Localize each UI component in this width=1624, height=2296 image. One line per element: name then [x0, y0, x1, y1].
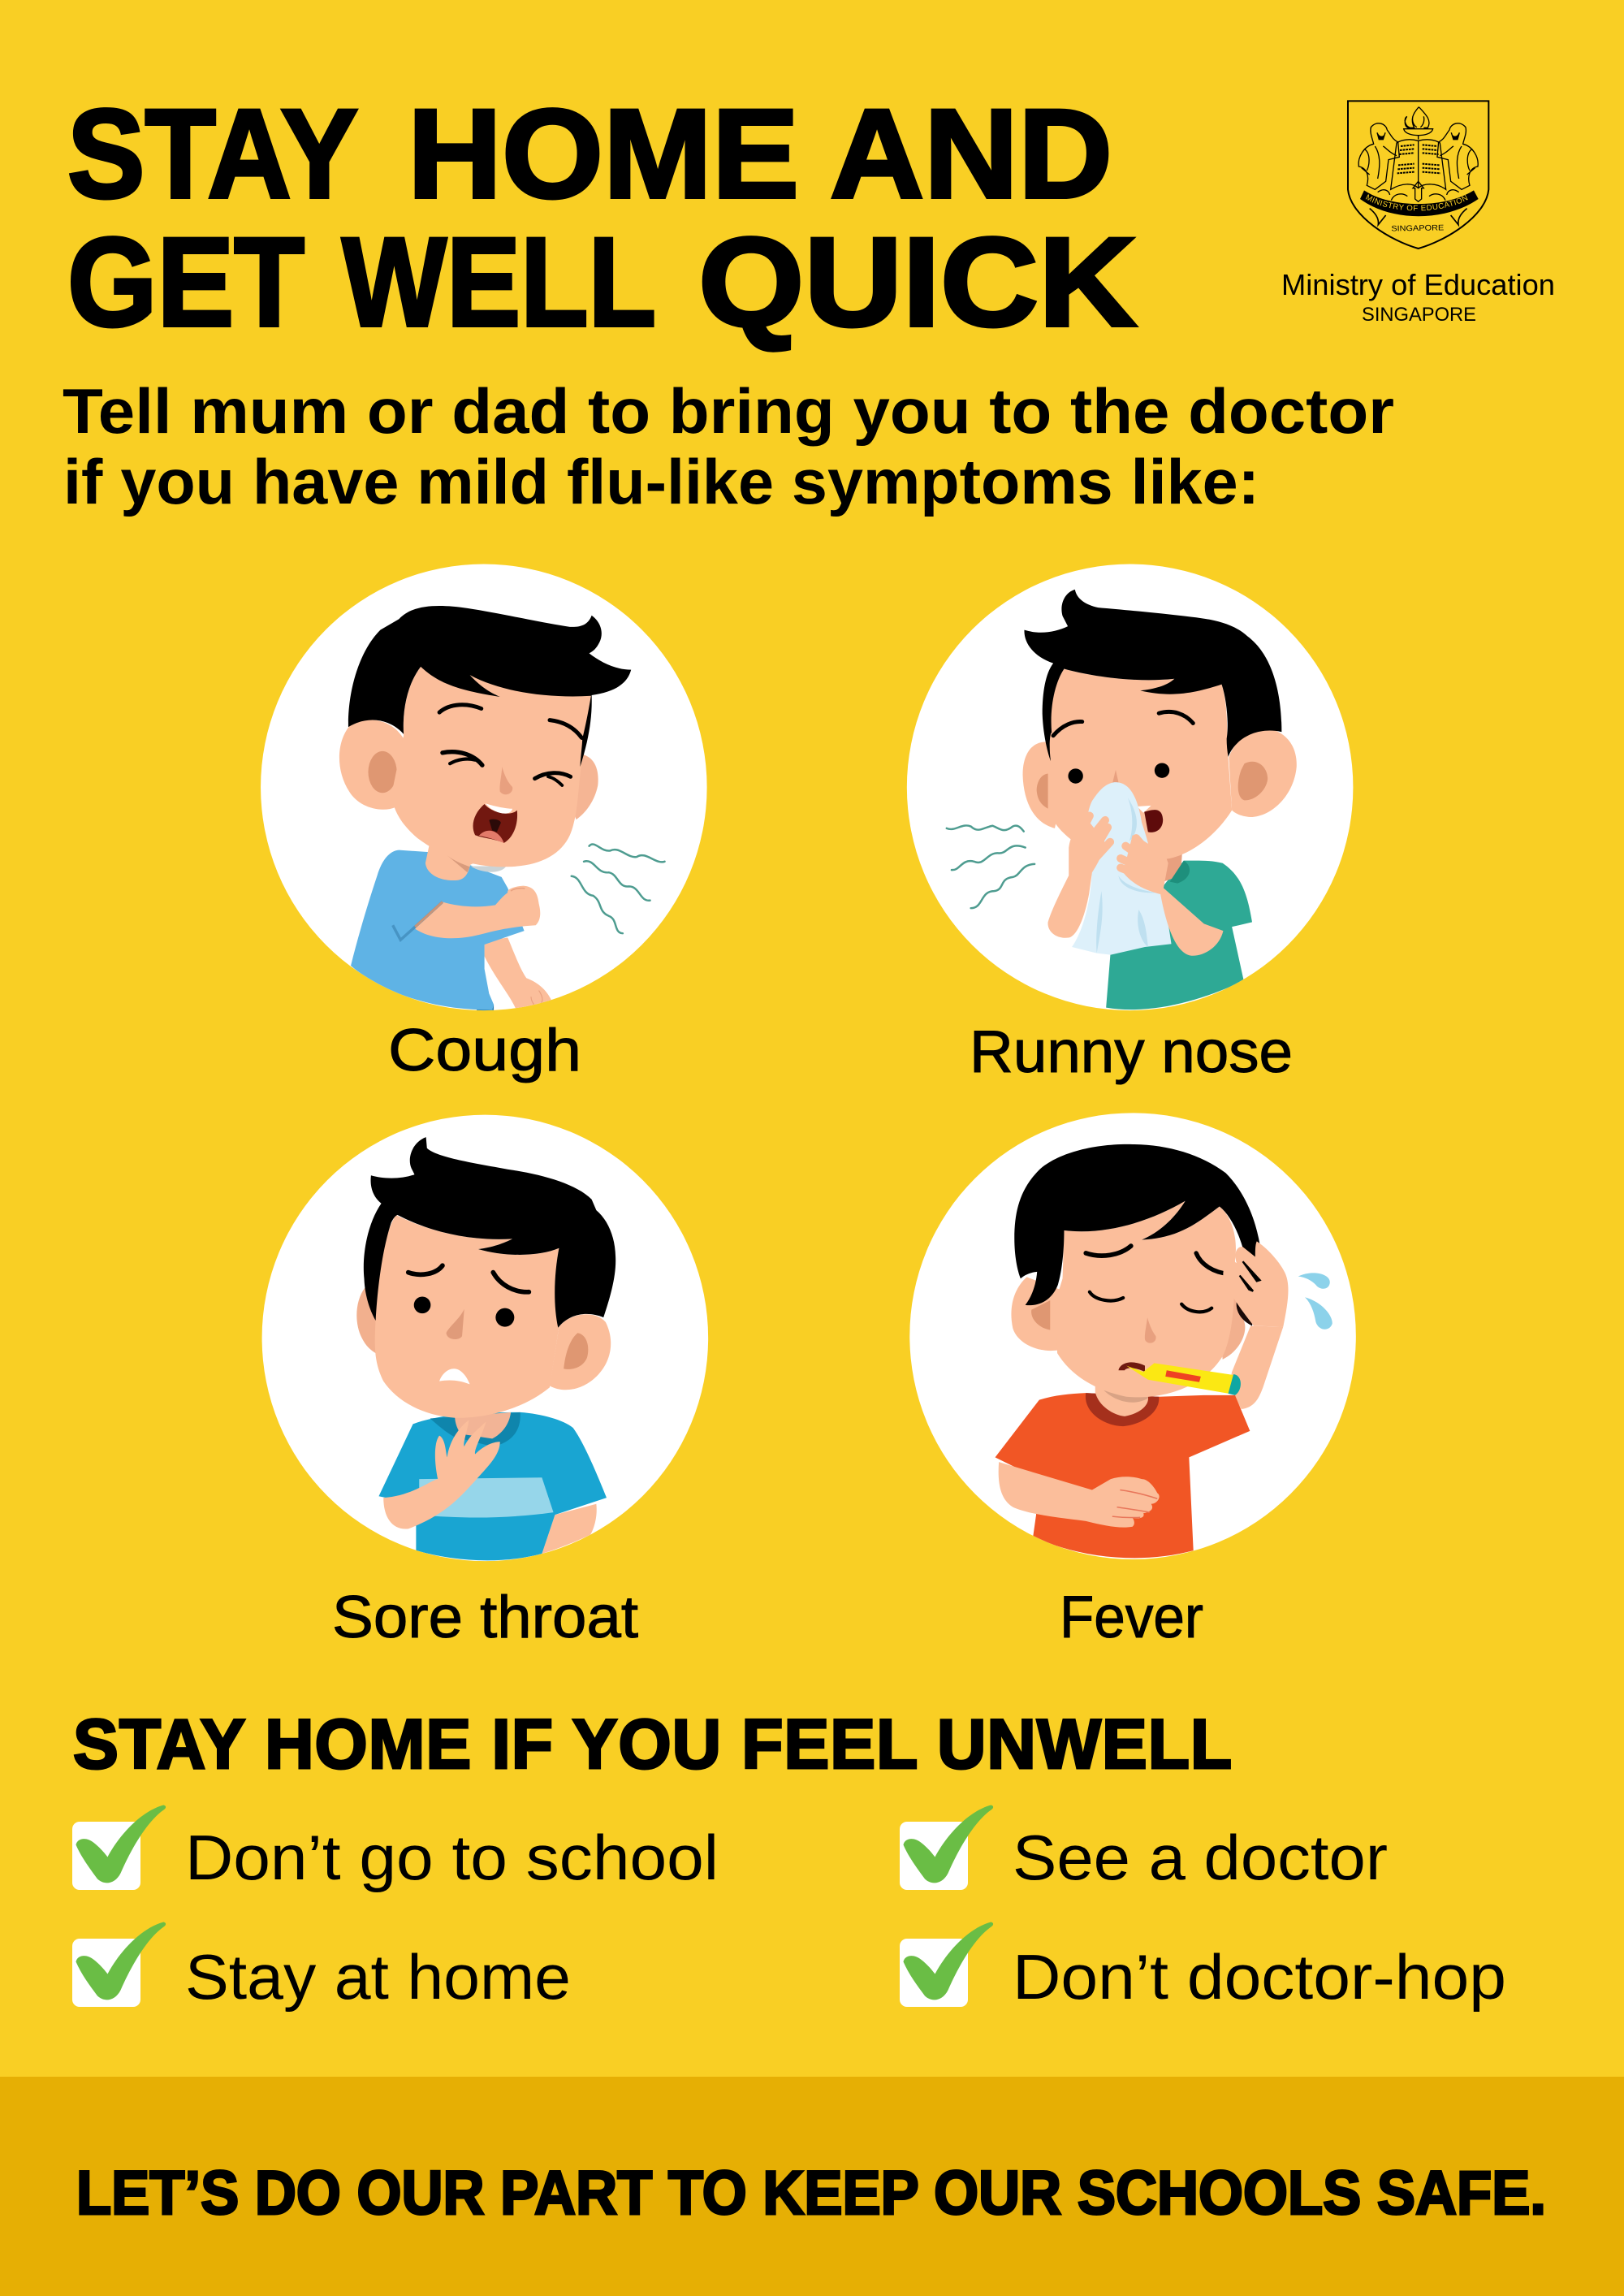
label: cough: Cough [388, 1018, 581, 1083]
panel: cough [261, 564, 707, 1083]
title: HOME [408, 84, 799, 225]
boy with fever [996, 1144, 1288, 1558]
item: stay at home: Stay at home [185, 1941, 571, 2013]
thermometer [1126, 1363, 1233, 1394]
item: stay at home [72, 1922, 571, 2013]
title: WELL [342, 212, 656, 353]
logo text: Ministry of Education [1281, 268, 1555, 301]
title: QUICK [698, 212, 1137, 353]
boy coughing [339, 606, 631, 1018]
title [67, 84, 1137, 353]
panel: runny nose [907, 564, 1353, 1085]
footer message: LET’S DO OUR PART TO KEEP OUR SCHOOLS SAFE. [76, 2159, 1546, 2228]
logo: Ministry of Education [1281, 100, 1555, 326]
sweat drops [1298, 1273, 1332, 1330]
crest: SINGAPORE [1391, 223, 1445, 234]
item: see a doctor: See a doctor [1013, 1822, 1388, 1893]
subtitle: if you have mild flu-like symptoms like: [63, 446, 1259, 517]
label: runny nose: Runny nose [970, 1019, 1293, 1085]
boy holding throat [356, 1137, 615, 1560]
item: don't go to school [72, 1805, 719, 1893]
crest [1347, 100, 1489, 249]
circle backdrop [261, 564, 707, 1010]
panel: fever [909, 1113, 1356, 1650]
runny nose wave lines [947, 825, 1034, 908]
checklist [72, 1805, 1506, 2013]
heading: stay home if you feel unwell: STAY HOME IF YOU FEEL UNWELL [73, 1706, 1233, 1784]
label: fever: Fever [1060, 1585, 1203, 1650]
subtitle: Tell mum or dad to bring you to the doctor [63, 375, 1394, 447]
item: see a doctor [900, 1805, 1388, 1893]
item: don't doctor-hop [900, 1922, 1506, 2013]
boy blowing nose [1023, 590, 1297, 1010]
crest: MINISTRY OF EDUCATION [1366, 194, 1468, 211]
logo sub text: SINGAPORE [1362, 304, 1476, 326]
item: don't doctor-hop: Don’t doctor-hop [1013, 1941, 1506, 2013]
cough wave lines [572, 844, 665, 933]
footer band [0, 2077, 1624, 2296]
title: STAY [67, 84, 358, 225]
label: sore throat: Sore throat [332, 1585, 638, 1650]
circle backdrop [909, 1113, 1356, 1559]
banner [1360, 190, 1479, 216]
circle backdrop [907, 564, 1353, 1010]
title: GET [67, 212, 304, 353]
subtitle [63, 375, 1394, 517]
circle backdrop [262, 1115, 708, 1561]
item: don't go to school: Don’t go to school [185, 1822, 719, 1893]
title: AND [830, 84, 1112, 225]
panel: sore throat [262, 1115, 708, 1650]
